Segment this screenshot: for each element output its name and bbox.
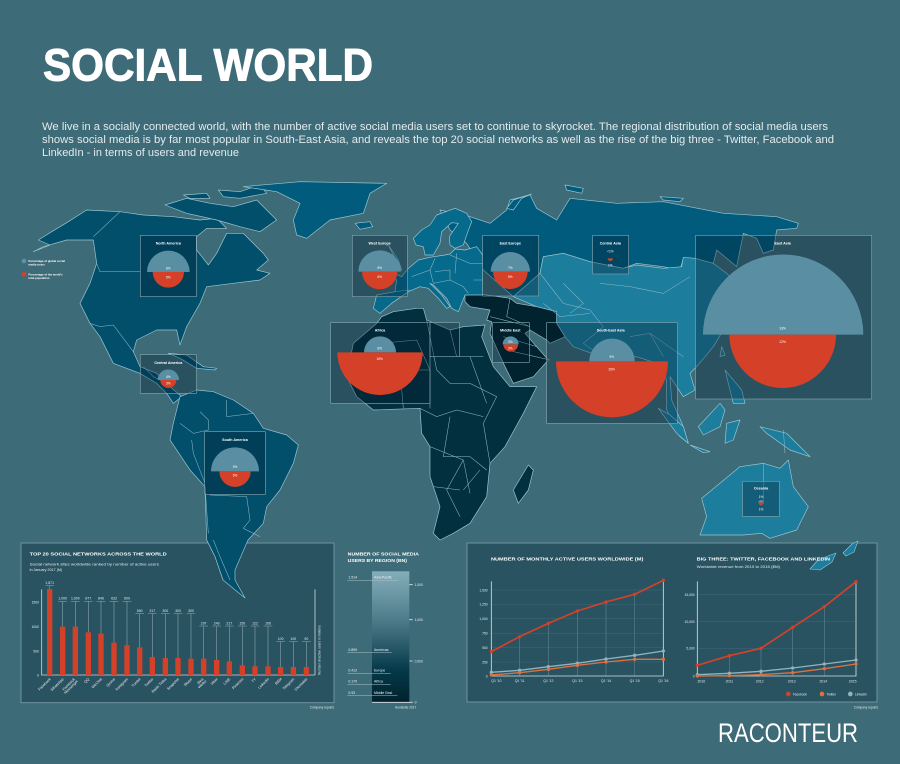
Oceania	[743, 481, 779, 516]
Central Asia	[593, 235, 629, 274]
Central America: 3%	[166, 381, 171, 385]
South America: 9%	[233, 465, 237, 469]
source note: Hootsuite 2017	[395, 706, 416, 710]
heading: NUMBER OF SOCIAL MEDIA	[348, 552, 420, 557]
South-East Asia: South-East Asia	[597, 329, 626, 333]
axes and grid: 1,500	[479, 588, 488, 592]
East Europe: 7%	[508, 266, 513, 270]
Central and East Asia	[513, 253, 740, 443]
network name labels: Pinterest	[231, 677, 244, 690]
axes and grid: 2010	[697, 680, 705, 684]
chart legend: Facebook	[793, 692, 807, 696]
axes and grid: 750	[482, 632, 488, 636]
right axis label: Number of active users in millions	[317, 625, 321, 675]
network name labels: Tumblr	[131, 677, 142, 688]
region values: 1.514	[348, 576, 357, 580]
panel subtitle	[30, 562, 159, 572]
heading	[348, 552, 420, 563]
intro text: shows social media is by far most popular in South-East Asia, and reveals the top 20 social networks as well as the rise of the big three - Twitter, Facebook and	[42, 134, 834, 146]
intro text: LinkedIn - in terms of users and revenue	[42, 147, 239, 159]
axes and grid: 10,000	[684, 620, 695, 624]
value labels: 150	[239, 621, 245, 625]
Australia	[700, 460, 808, 538]
network name labels: WhatsApp	[50, 677, 65, 692]
South America	[170, 390, 298, 598]
South-East Asia	[547, 323, 677, 423]
scale: 0	[415, 701, 417, 705]
value labels: 122	[252, 621, 258, 625]
Oceania: Oceania	[754, 486, 769, 490]
intro text: We live in a socially connected world, with the number of active social media users set to continue to skyrocket. The regional distribution of social media users	[42, 121, 829, 133]
Twitter line	[696, 662, 858, 678]
axes and grid: Q1 '14	[601, 679, 611, 683]
European borders	[395, 253, 483, 293]
Madagascar	[513, 465, 533, 503]
network name labels: LINE	[223, 677, 232, 686]
axes and grid: 2015	[849, 680, 857, 684]
Facebook line	[696, 580, 858, 667]
Cuba and Caribbean	[168, 353, 217, 370]
region values: Middle East	[374, 691, 392, 695]
Twitter line	[490, 658, 665, 677]
value labels: 300	[175, 609, 181, 613]
network name labels: QQ	[84, 677, 90, 684]
network name labels: Skype	[183, 677, 193, 687]
value labels: 300	[188, 609, 194, 613]
axes and grid: 1,250	[479, 603, 488, 607]
panel subtitle: Social network sites worldwide ranked by number of active users	[30, 562, 159, 566]
chart legend: Twitter	[827, 692, 836, 696]
Eurasia and Africa borders	[367, 273, 785, 517]
value labels: 1,000	[58, 597, 67, 601]
New Zealand	[810, 541, 858, 570]
y axis: 500	[33, 649, 39, 653]
axes and grid: 2011	[726, 680, 733, 684]
Africa: 6%	[377, 346, 382, 350]
network name labels: Sina	[196, 677, 205, 685]
Middle East: 3%	[508, 340, 513, 344]
axes and grid: 250	[482, 660, 488, 664]
region values: Americas	[374, 648, 389, 652]
East Europe: East Europe	[500, 242, 521, 246]
Central Asia: <1%	[607, 249, 614, 253]
network name labels: Viber	[210, 677, 219, 686]
y axis	[32, 589, 315, 677]
chart heading: NUMBER OF MONTHLY ACTIVE USERS WORLDWIDE (M)	[491, 556, 644, 561]
West Europe: West Europe	[369, 242, 391, 246]
UK	[387, 245, 402, 270]
chart heading: BIG THREE: TWITTER, FACEBOOK AND LINKEDIN	[697, 557, 830, 562]
panel: line charts	[467, 543, 877, 702]
heading: USERS BY REGION (BN)	[348, 558, 408, 563]
network name labels: Telegram	[282, 677, 295, 691]
Arctic islands	[165, 185, 277, 232]
chart legend	[786, 692, 867, 696]
value labels: 600	[124, 597, 130, 601]
Americas borders	[90, 212, 260, 580]
axes and grid: 2012	[756, 680, 764, 684]
Central Asia: 1%	[608, 264, 613, 268]
axes and grid: 2013	[788, 680, 796, 684]
chart legend: LinkedIn	[855, 692, 867, 696]
legend: Percentage of global social	[28, 259, 65, 263]
legend: total population	[28, 276, 50, 280]
map: Europe	[373, 208, 483, 313]
Africa	[331, 323, 459, 403]
South America	[205, 432, 265, 494]
value labels: 300	[162, 609, 168, 613]
Russia	[440, 195, 798, 297]
scale	[372, 583, 423, 705]
y axis: 0	[37, 673, 39, 677]
value labels	[45, 581, 308, 641]
value labels: 1,000	[71, 597, 80, 601]
network name labels: Snapchat	[166, 677, 180, 691]
legend	[22, 259, 65, 280]
axes and grid: 5,000	[686, 647, 695, 651]
network name labels: VKontakte	[294, 677, 308, 692]
Central America: 4%	[166, 375, 171, 379]
value labels: 550	[137, 609, 143, 613]
bars	[47, 589, 309, 675]
East Asia: 22%	[779, 340, 786, 344]
value labels: 1,871	[45, 581, 54, 585]
y axis: 1500	[32, 601, 39, 605]
region boxes: Americas and West side	[140, 235, 459, 494]
panel subtitle: in January 2017 (M)	[30, 568, 62, 572]
Africa: Africa	[375, 329, 386, 333]
scale: 1,000	[415, 618, 423, 622]
value labels: 297	[201, 621, 207, 625]
South-East Asia: 26%	[609, 367, 615, 371]
East Asia	[696, 235, 872, 399]
network name labels: Weibo	[197, 679, 207, 689]
axes and grid: 500	[482, 646, 488, 650]
South-East Asian islands	[658, 347, 810, 457]
Africa: 16%	[376, 357, 383, 361]
North America: North America	[156, 242, 182, 246]
y axis: 1000	[32, 625, 39, 629]
value labels: 217	[226, 621, 232, 625]
region values: 0.412	[348, 669, 357, 673]
chart subtitle: Worldwide revenue from 2010 to 2015 ($M)	[697, 565, 780, 569]
West Europe: 8%	[377, 266, 382, 270]
East Asia: 33%	[779, 326, 786, 330]
chart: big three revenue	[684, 557, 878, 710]
South America: South America	[222, 438, 249, 442]
map: Eurasia, Africa, Oceania	[347, 185, 810, 540]
value labels: 100	[290, 637, 296, 641]
region values	[347, 576, 398, 696]
value labels: 249	[214, 621, 220, 625]
map: Americas	[33, 182, 387, 598]
region values: Africa	[374, 679, 383, 683]
scale: 1,500	[415, 583, 423, 587]
network name labels: Baidu Tieba	[151, 677, 168, 694]
gradient bar	[372, 571, 409, 702]
axes and grid: 0	[486, 674, 488, 678]
axes and grid: 15,000	[684, 593, 695, 597]
Oceania: 1%	[759, 495, 763, 499]
East Asia: East Asia	[774, 242, 792, 246]
Iceland	[355, 222, 373, 229]
network name labels: Twitter	[144, 677, 155, 688]
LinkedIn line	[490, 649, 665, 674]
Middle East: 3%	[508, 346, 513, 350]
network name labels: Messenger	[63, 679, 80, 695]
value labels: 846	[98, 597, 104, 601]
North America: 8%	[166, 266, 171, 270]
North America: 5%	[166, 275, 171, 279]
value labels: 317	[149, 609, 155, 613]
region boxes: Eurasia and Oceania	[483, 235, 872, 516]
Scandinavia	[413, 208, 472, 255]
axes and grid	[684, 581, 857, 684]
value labels: 106	[265, 621, 271, 625]
East Europe: 6%	[508, 275, 513, 279]
Middle East: Middle East	[500, 329, 521, 333]
value labels: 632	[111, 597, 117, 601]
South-East Asia: 9%	[609, 355, 614, 359]
value labels: 90	[304, 637, 308, 641]
North America	[140, 235, 196, 297]
axes and grid: Q1 '10	[491, 679, 501, 683]
East Europe	[483, 235, 539, 296]
axes and grid: Q1 '11	[515, 679, 525, 683]
axes and grid: Q1 '15	[630, 679, 640, 683]
Africa	[347, 308, 537, 540]
network name labels: Facebook	[62, 677, 76, 691]
axes and grid: 2014	[819, 680, 827, 684]
Middle East	[465, 294, 565, 383]
axes and grid: 0	[693, 674, 695, 678]
axes and grid	[479, 580, 668, 683]
Greenland	[243, 182, 387, 238]
value labels: 877	[85, 597, 91, 601]
intro text	[42, 121, 834, 159]
Middle East	[493, 323, 529, 362]
map	[33, 182, 858, 598]
axes and grid: Q1 '13	[572, 679, 582, 683]
network name labels: Facebook	[38, 677, 52, 691]
Facebook line	[490, 579, 665, 653]
network name labels: Instagram	[115, 677, 129, 692]
source note: Company reports	[854, 706, 878, 710]
Central Asia: Central Asia	[600, 242, 622, 246]
axes and grid: Q1 '16	[658, 679, 668, 683]
source note: Company reports	[310, 706, 334, 710]
panel heading: TOP 20 SOCIAL NETWORKS ACROSS THE WORLD	[30, 552, 168, 557]
title: SOCIAL WORLD	[43, 40, 373, 90]
axes and grid: Q1 '12	[543, 679, 553, 683]
South America: 6%	[233, 474, 237, 478]
panel: top 20 social networks	[21, 543, 334, 710]
network name labels: WeChat	[91, 677, 103, 689]
European mainland	[373, 247, 483, 313]
Oceania: 1%	[759, 507, 763, 511]
network name labels: Qzone	[106, 677, 116, 688]
logo: RACONTEUR	[718, 718, 858, 748]
value stems	[45, 586, 311, 667]
legend: media users	[28, 263, 45, 267]
region values: Europe	[374, 669, 385, 673]
West Europe	[352, 235, 407, 297]
legend: Percentage of the world's	[28, 272, 63, 276]
network name labels	[38, 677, 308, 695]
LinkedIn line	[696, 658, 858, 676]
Central America	[140, 355, 196, 393]
panel: users by region	[347, 552, 423, 710]
Central America: Central America	[154, 361, 183, 365]
network name labels: LinkedIn	[257, 677, 270, 690]
value labels: 100	[278, 637, 284, 641]
North and Central America	[33, 210, 270, 403]
chart: monthly active users	[479, 556, 668, 683]
region values: 0.93	[348, 691, 355, 695]
West Europe: 6%	[377, 275, 382, 279]
region values: 0.170	[348, 679, 357, 683]
scale: 0,500	[415, 659, 423, 663]
region values: Asia-Pacific	[374, 576, 392, 580]
network name labels: YY	[251, 677, 257, 683]
axes and grid: 1,000	[479, 617, 488, 621]
region values: 0.899	[348, 648, 357, 652]
network name labels: BBM	[274, 677, 283, 686]
